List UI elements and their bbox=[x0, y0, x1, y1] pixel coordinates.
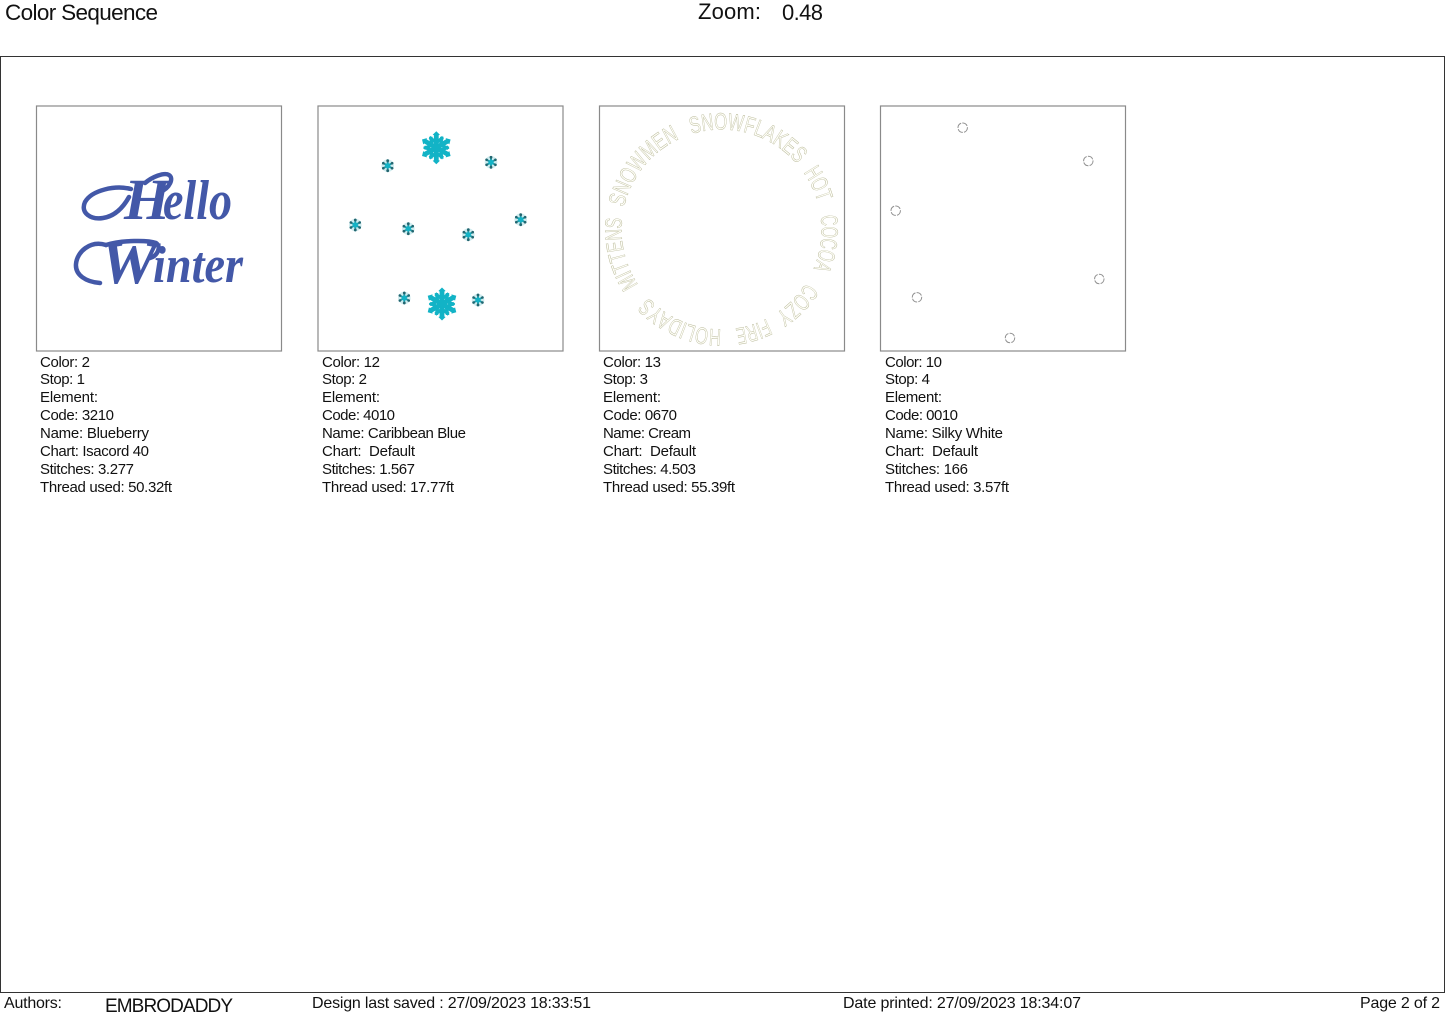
info: stop 3: Color: 13 bbox=[603, 354, 661, 371]
panel: stop 1 Hello Winter bbox=[36, 106, 282, 496]
embroidery: Hello Winter lettering: ello bbox=[163, 170, 232, 232]
footer: Authors: bbox=[4, 995, 62, 1012]
info: stop 2: Element: bbox=[322, 389, 380, 406]
embroidery: circular word ring: HOT bbox=[804, 164, 834, 198]
embroidery: Hello Winter lettering: inter bbox=[153, 237, 244, 294]
embroidery: circular word ring: SNOWMEN bbox=[609, 124, 678, 206]
zoom readout: 0.48 bbox=[782, 0, 823, 25]
info: stop 4: Stitches: 166 bbox=[885, 461, 968, 478]
info: stop 2: Chart: Default bbox=[322, 443, 416, 460]
info: stop 3: Thread used: 55.39ft bbox=[603, 479, 736, 496]
info: stop 2: Name: Caribbean Blue bbox=[322, 425, 466, 442]
embroidery: Hello Winter lettering: W bbox=[100, 230, 161, 296]
info: stop 3: Stop: 3 bbox=[603, 371, 648, 388]
embroidery: small white circles bbox=[891, 123, 1104, 343]
embroidery: circular word ring bbox=[605, 112, 838, 346]
panel: stop 2 snowflakes bbox=[318, 106, 563, 496]
info: stop 3: Stitches: 4.503 bbox=[603, 461, 696, 478]
zoom readout bbox=[698, 0, 823, 25]
embroidery: circular word ring: FIRE bbox=[736, 319, 772, 345]
info: stop 2: Stop: 2 bbox=[322, 371, 367, 388]
info: stop 2: Thread used: 17.77ft bbox=[322, 479, 455, 496]
info: stop 1: Element: bbox=[40, 389, 98, 406]
info: stop 3: Element: bbox=[603, 389, 661, 406]
info: stop 4: Code: 0010 bbox=[885, 407, 958, 424]
info: stop 4: Element: bbox=[885, 389, 942, 406]
info: stop 4: Stop: 4 bbox=[885, 371, 930, 388]
info: stop 2: Stitches: 1.567 bbox=[322, 461, 415, 478]
embroidery: circular word ring: SNOWFLAKES bbox=[689, 112, 807, 162]
info: stop 1: Name: Blueberry bbox=[40, 425, 150, 442]
title: Color Sequence bbox=[5, 0, 158, 25]
embroidery: circular word ring: COZY bbox=[778, 286, 818, 328]
info: stop 4: Name: Silky White bbox=[885, 425, 1003, 442]
embroidery: Hello Winter lettering bbox=[76, 167, 244, 296]
embroidery: circular word ring: COCOA bbox=[814, 216, 838, 270]
info: stop 1: Thread used: 50.32ft bbox=[40, 479, 173, 496]
info: stop 1 bbox=[40, 354, 173, 496]
footer: Date printed: 27/09/2023 18:34:07 bbox=[843, 995, 1081, 1012]
panel: stop 4 circles bbox=[880, 106, 1126, 496]
info: stop 1: Color: 2 bbox=[40, 354, 90, 371]
info: stop 1: Chart: Isacord 40 bbox=[40, 443, 149, 460]
info: stop 3: Name: Cream bbox=[603, 425, 691, 442]
footer: EMBRODADDY bbox=[105, 996, 233, 1017]
info: stop 3: Code: 0670 bbox=[603, 407, 677, 424]
info: stop 1: Stitches: 3.277 bbox=[40, 461, 134, 478]
info: stop 3: Chart: Default bbox=[603, 443, 697, 460]
footer: Design last saved : 27/09/2023 18:33:51 bbox=[312, 995, 591, 1012]
info: stop 1: Code: 3210 bbox=[40, 407, 114, 424]
info: stop 4: Color: 10 bbox=[885, 354, 942, 371]
embroidery: Hello Winter lettering: H bbox=[123, 167, 172, 232]
info: stop 2: Color: 12 bbox=[322, 354, 380, 371]
embroidery: circular word ring: MITTENS bbox=[605, 218, 638, 292]
embroidery: circular word ring: HOLIDAYS bbox=[638, 300, 720, 346]
footer: Page 2 of 2 bbox=[1360, 995, 1440, 1012]
info: stop 4: Chart: Default bbox=[885, 443, 979, 460]
info: stop 4: Thread used: 3.57ft bbox=[885, 479, 1010, 496]
embroidery: small snowflakes bbox=[349, 156, 527, 306]
info: stop 1: Stop: 1 bbox=[40, 371, 85, 388]
info: stop 2: Code: 4010 bbox=[322, 407, 395, 424]
embroidery: large snowflakes bbox=[418, 131, 460, 320]
info: stop 3 bbox=[603, 354, 736, 496]
info: stop 4 bbox=[885, 354, 1010, 496]
footer bbox=[4, 995, 1440, 1017]
panel: stop 3 word ring bbox=[598, 105, 846, 496]
info: stop 2 bbox=[322, 354, 466, 496]
